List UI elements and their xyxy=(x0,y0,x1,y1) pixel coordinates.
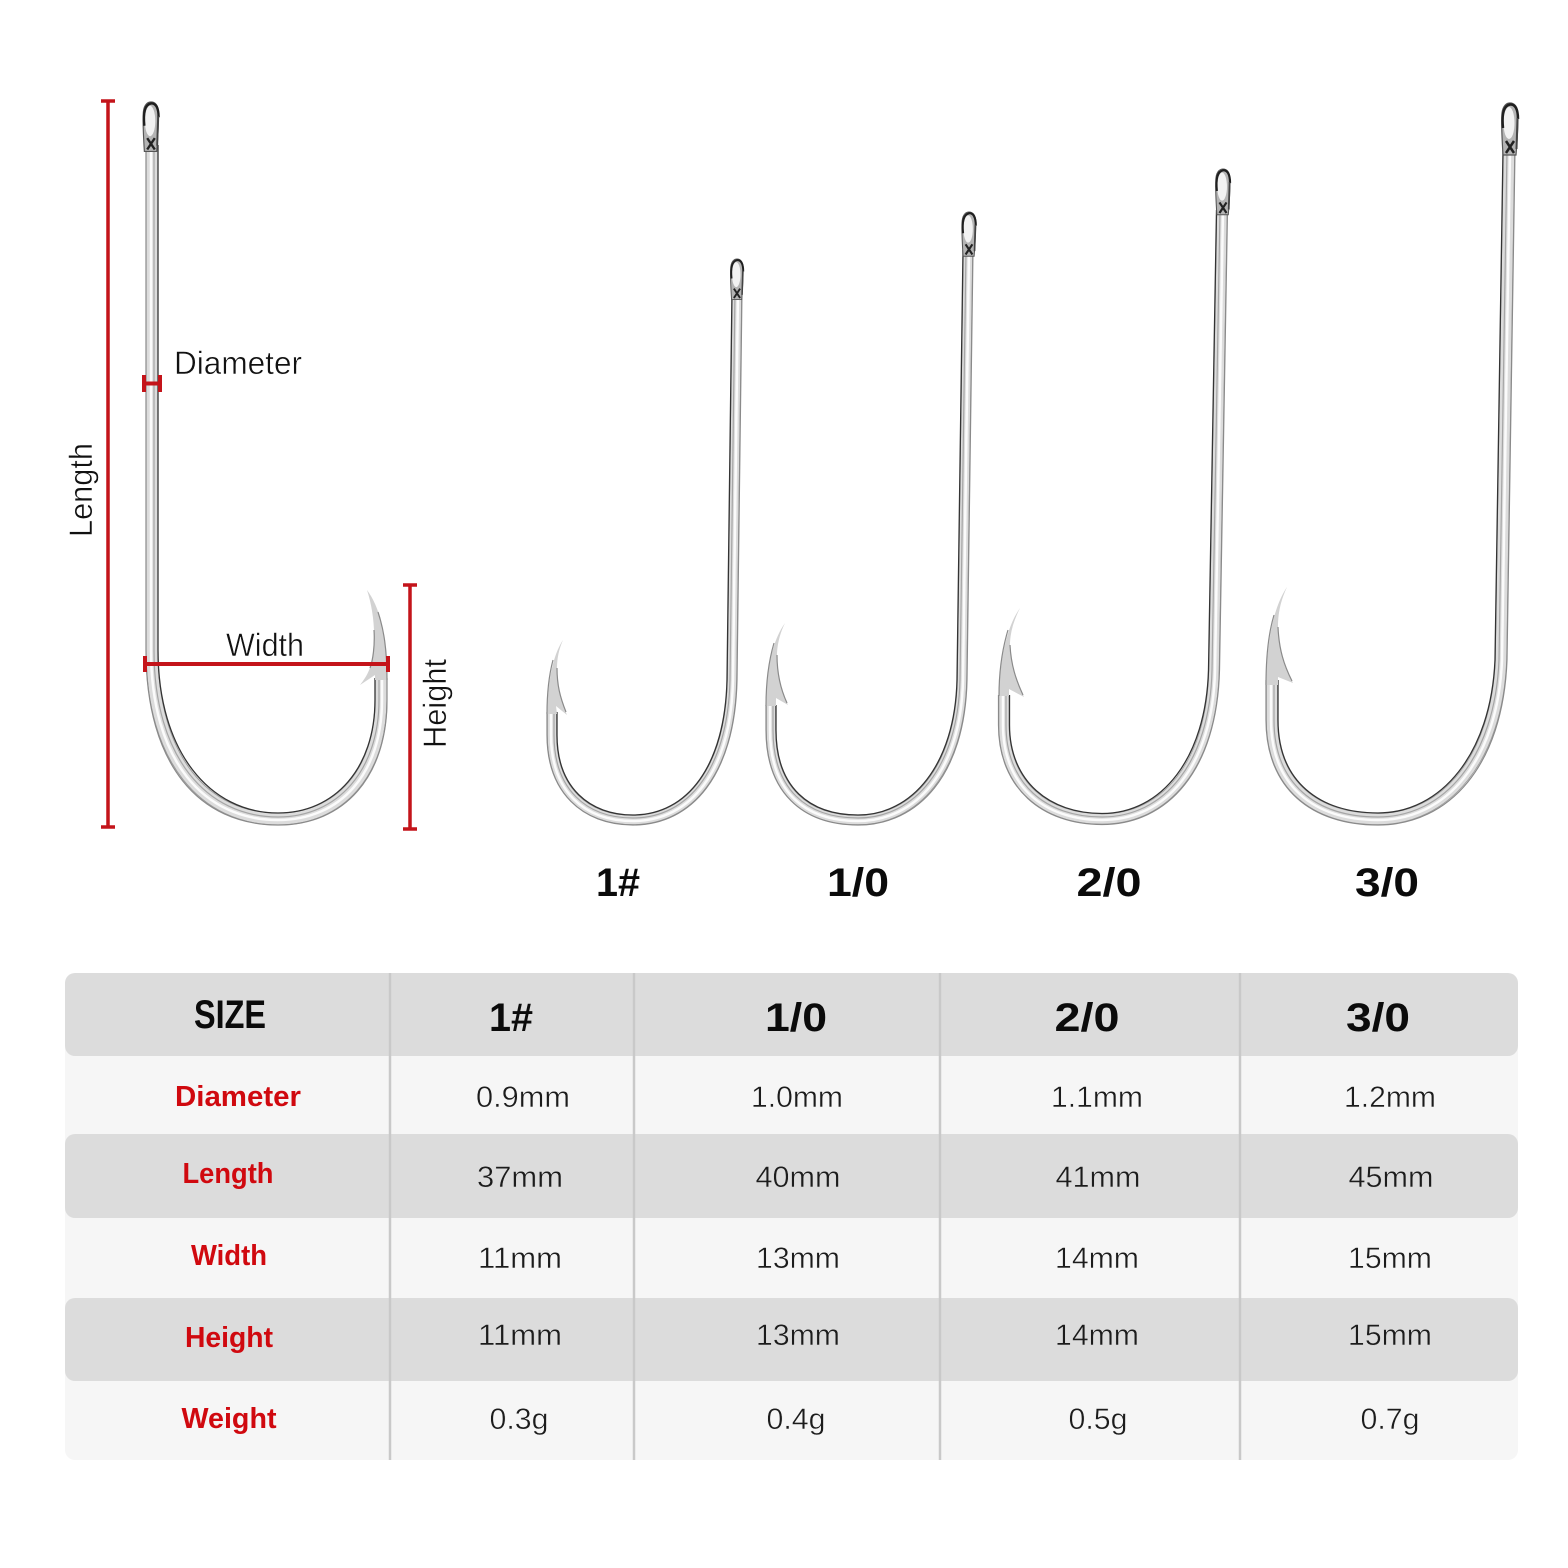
row: length: 41mm xyxy=(1056,1161,1140,1194)
row: height: 15mm xyxy=(1348,1319,1432,1352)
table row backgrounds xyxy=(65,973,1518,1460)
dimension: length xyxy=(101,101,115,827)
table header: 3/0 xyxy=(1346,996,1410,1040)
hook: 3/0 xyxy=(1266,103,1518,825)
diagram: annotated hook xyxy=(63,101,453,829)
row: height xyxy=(185,1319,1432,1354)
row: weight: 0.5g xyxy=(1068,1403,1128,1436)
label: width: Width xyxy=(226,627,304,663)
hook: 1# xyxy=(547,259,743,825)
size label: 3/0: 3/0 xyxy=(1355,861,1419,905)
row: weight xyxy=(182,1403,1420,1436)
row: weight: 0.7g xyxy=(1360,1403,1420,1436)
size label: 1/0: 1/0 xyxy=(827,861,889,905)
row: height: 14mm xyxy=(1055,1319,1139,1352)
row: length: Length xyxy=(182,1158,274,1190)
size label: 2/0: 2/0 xyxy=(1076,861,1142,905)
table header: 1# xyxy=(489,996,533,1040)
row: diameter: 1.2mm xyxy=(1344,1081,1436,1114)
table header: SIZE xyxy=(194,993,266,1037)
row: width: 11mm xyxy=(478,1242,562,1275)
label: diameter: Diameter xyxy=(174,345,302,381)
row: height: 13mm xyxy=(756,1319,840,1352)
row: weight: 0.4g xyxy=(766,1403,826,1436)
table header: 2/0 xyxy=(1054,996,1120,1040)
row: width: 15mm xyxy=(1348,1242,1432,1275)
row: width: Width xyxy=(191,1240,267,1272)
dimension: width xyxy=(145,656,388,672)
row: diameter: Diameter xyxy=(175,1081,301,1113)
row: length: 37mm xyxy=(477,1161,563,1194)
column dividers xyxy=(390,973,1240,1460)
row: diameter xyxy=(175,1081,1436,1114)
hook: 1/0 xyxy=(766,212,976,825)
row: diameter: 1.1mm xyxy=(1051,1081,1143,1114)
row: weight: 0.3g xyxy=(490,1403,548,1436)
row: length: 45mm xyxy=(1348,1161,1434,1194)
label: height: Height xyxy=(417,659,453,748)
row: height: 11mm xyxy=(478,1319,562,1352)
row: width: 14mm xyxy=(1055,1242,1139,1275)
row: width: 13mm xyxy=(756,1242,840,1275)
size table xyxy=(65,973,1518,1460)
size label: 1#: 1# xyxy=(596,861,640,905)
row: diameter: 0.9mm xyxy=(476,1081,570,1114)
dimension: height xyxy=(403,585,417,829)
row: width xyxy=(191,1240,1432,1275)
table header xyxy=(194,993,1410,1040)
table header: 1/0 xyxy=(765,996,827,1040)
hook: annotated xyxy=(143,102,387,825)
row: height: Height xyxy=(185,1322,273,1354)
row: weight: Weight xyxy=(182,1403,277,1435)
row: length: 40mm xyxy=(756,1161,840,1194)
row: length xyxy=(182,1158,1434,1194)
dimension: diameter xyxy=(144,375,160,392)
hook: 2/0 xyxy=(998,169,1230,824)
label: length: Length xyxy=(63,443,99,537)
row: diameter: 1.0mm xyxy=(751,1081,843,1114)
